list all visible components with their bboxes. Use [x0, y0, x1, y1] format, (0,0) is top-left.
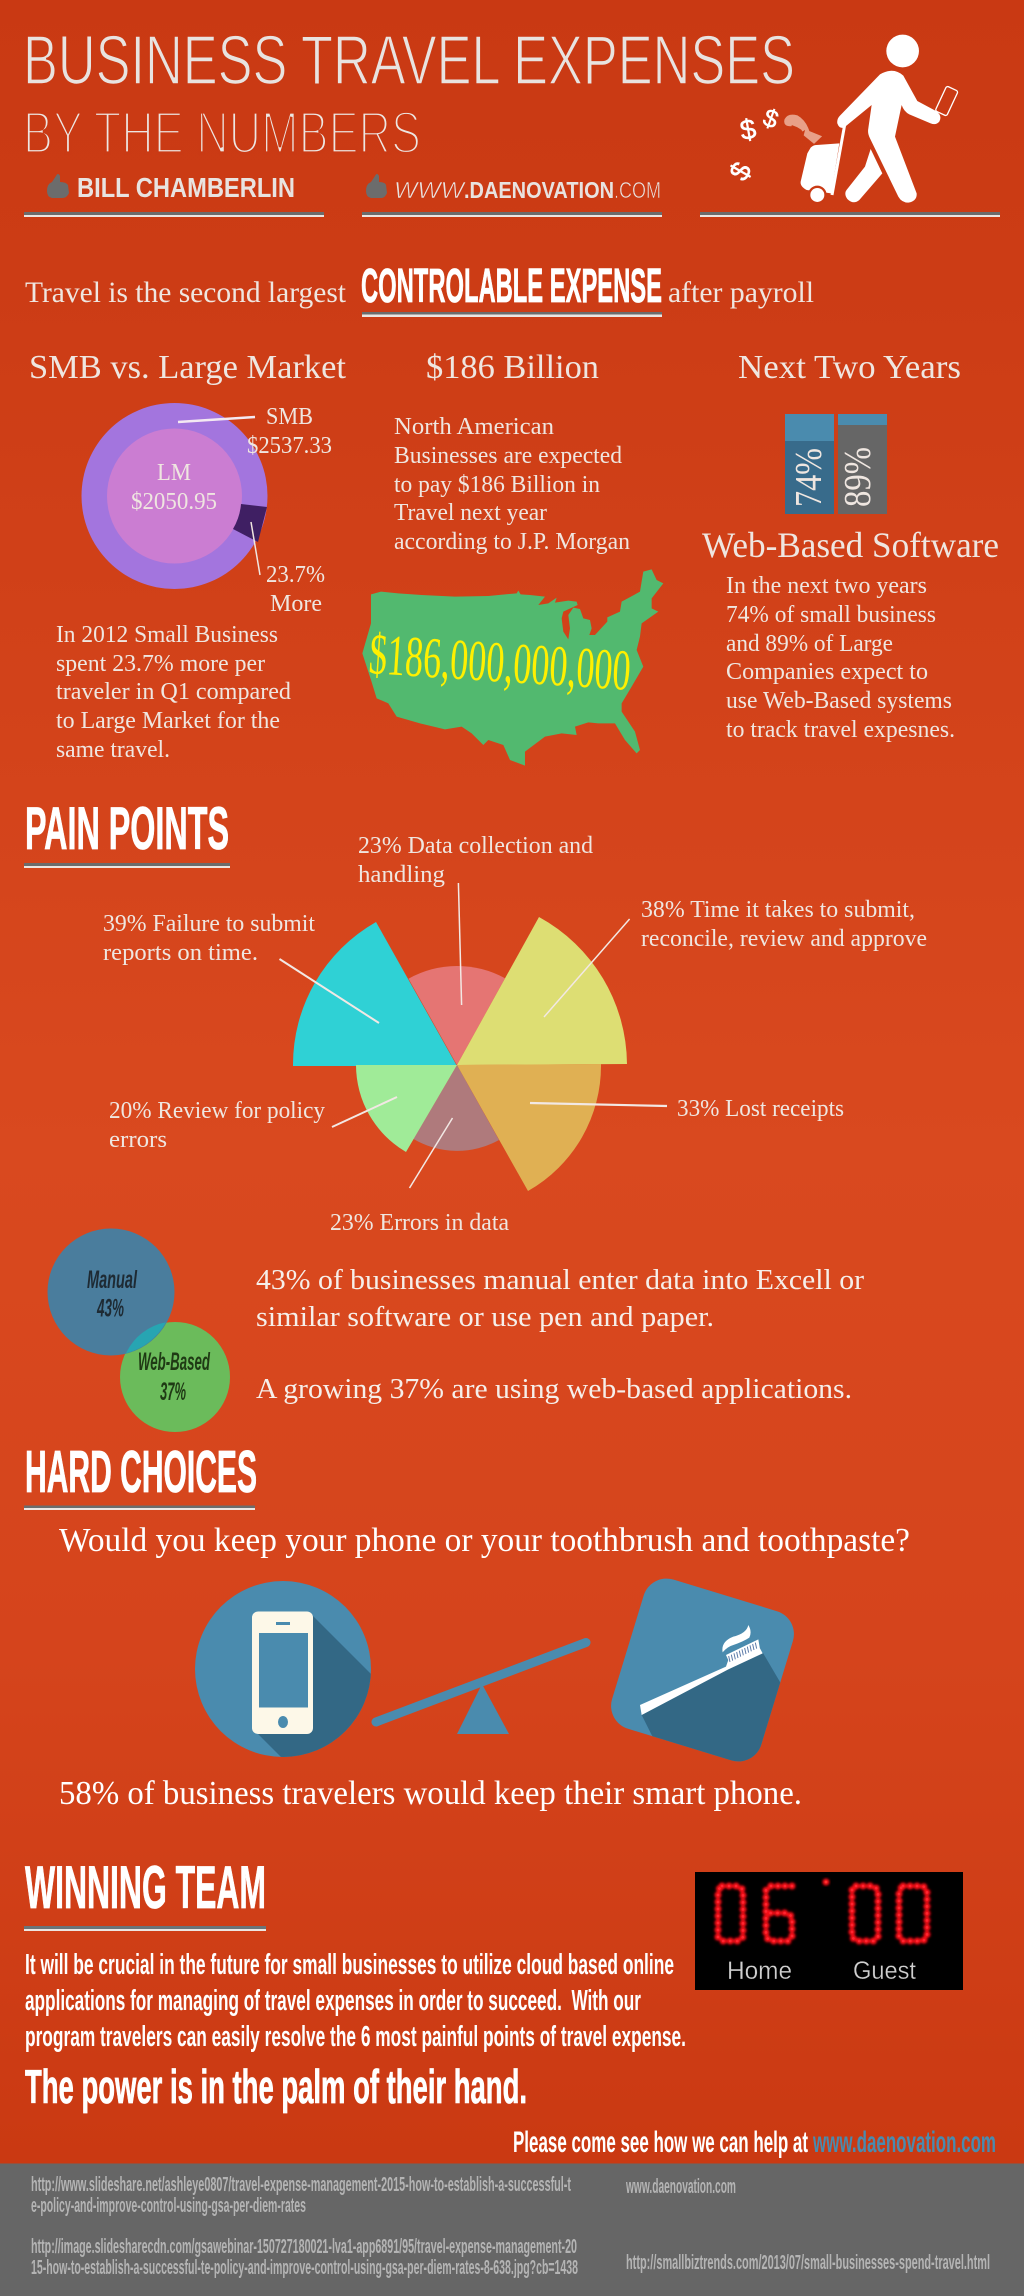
website: .DAENOVATION	[464, 177, 614, 203]
icon: traveler with suitcase	[723, 35, 958, 204]
panel: SMB vs large market	[29, 349, 347, 763]
heading: Next Two Years	[738, 349, 961, 386]
result statement: 58% of business travelers would keep their smart phone.	[59, 1775, 802, 1812]
icon: traveler with suitcase: $	[723, 156, 758, 186]
subtitle: BY THE NUMBERS	[23, 100, 421, 166]
text block: and 89% of Large	[726, 631, 893, 657]
text block: Businesses are expected	[394, 443, 622, 469]
bar chart	[785, 414, 887, 514]
text block	[25, 1949, 686, 2053]
icon: thumbs up author	[47, 174, 69, 198]
icon: seesaw	[376, 1642, 586, 1734]
label: failure to submit	[103, 911, 315, 966]
header	[23, 21, 1000, 217]
panel: pain points	[24, 795, 927, 1236]
author name: BILL CHAMBERLIN	[77, 172, 295, 203]
label: failure to submit: 39% Failure to submit	[103, 911, 315, 937]
scoreboard	[695, 1872, 963, 1990]
label: time to submit	[641, 897, 927, 952]
label: 23.7% more: 23.7%	[266, 562, 325, 588]
text block: data entry	[256, 1264, 864, 1405]
label: data collection	[358, 833, 593, 888]
scoreboard: Guest	[853, 1957, 916, 1985]
label: review	[109, 1098, 325, 1153]
heading: SMB vs. Large Market	[29, 349, 347, 386]
icon: traveler with suitcase: $	[759, 103, 782, 135]
label: 23.7% more: More	[270, 591, 322, 617]
label: data collection: handling	[358, 862, 445, 888]
call to action: Please come see how we can help at	[513, 2126, 808, 2159]
heading: WINNING TEAM	[25, 1854, 266, 1921]
label: data collection: 23% Data collection and	[358, 833, 593, 859]
label: time to submit: reconcile, review and approve	[641, 926, 927, 952]
heading: $186 Billion	[426, 349, 599, 386]
map: United States	[362, 569, 663, 766]
headline sentence	[25, 260, 814, 317]
label: SMB	[247, 404, 332, 459]
scoreboard: Home	[727, 1957, 792, 1985]
footer: sources	[0, 2164, 1024, 2296]
heading: HARD CHOICES	[25, 1439, 257, 1505]
text block	[726, 573, 955, 743]
panel: 186 billion	[362, 349, 663, 766]
text block: Travel next year	[394, 500, 547, 526]
icon: phone	[195, 1581, 371, 1757]
text block: use Web-Based systems	[726, 688, 952, 714]
venn diagram: manual and web-based	[48, 1228, 230, 1432]
footer: sources: e-policy-and-improve-control-using-gsa-per-diem-rates	[31, 2195, 306, 2217]
footer: sources: http://image.slidesharecdn.com/gsawebinar-150727180021-lva1-app6891/95/travel-expense-management-20	[31, 2236, 577, 2258]
headline sentence: after payroll	[668, 276, 814, 309]
text block	[394, 414, 630, 555]
map value: $186,000,000,000	[367, 621, 633, 703]
text block: data entry: similar software or use pen and paper.	[256, 1301, 714, 1333]
venn diagram: manual and web-based: Manual	[87, 1266, 138, 1294]
bar chart: 74%	[788, 448, 830, 507]
headline sentence: CONTROLABLE EXPENSE	[361, 260, 662, 313]
bar chart: 89%	[837, 447, 879, 507]
polar area chart	[280, 883, 667, 1191]
label: time to submit: 38% Time it takes to submit,	[641, 897, 915, 923]
headline sentence: Travel is the second largest	[25, 276, 347, 309]
label: failure to submit: reports on time.	[103, 940, 258, 966]
label: errors in data: 23% Errors in data	[330, 1210, 509, 1236]
label: SMB: $2537.33	[247, 433, 332, 459]
icon: traveler with suitcase: $	[738, 113, 759, 146]
subheading: Web-Based Software	[702, 525, 999, 565]
venn diagram: manual and web-based: 37%	[160, 1378, 186, 1406]
label: review: 20% Review for policy	[109, 1098, 325, 1124]
venn diagram: manual and web-based: Web-Based	[138, 1348, 210, 1376]
text block: In 2012 Small Business	[56, 622, 278, 648]
text block: according to J.P. Morgan	[394, 529, 630, 555]
website	[394, 177, 661, 203]
question: Would you keep your phone or your toothbrush and toothpaste?	[59, 1522, 910, 1559]
label: review: errors	[109, 1127, 167, 1153]
website: .COM	[614, 177, 661, 203]
donut chart	[82, 403, 268, 589]
label: SMB: SMB	[266, 404, 313, 430]
panel: next two years	[702, 349, 999, 743]
donut chart: $2050.95	[131, 489, 217, 515]
icon: toothbrush	[611, 1578, 794, 1762]
text block: data entry: 43% of businesses manual enter data into Excell or	[256, 1264, 864, 1296]
donut chart: LM	[157, 460, 191, 486]
footer: sources: http://www.slideshare.net/ashleye0807/travel-expense-management-2015-how-to-establish-a-successful-t	[31, 2174, 571, 2196]
website: WWW	[394, 177, 466, 203]
text block: traveler in Q1 compared	[56, 679, 291, 705]
text block	[56, 622, 291, 763]
icon: thumbs up website	[366, 174, 387, 198]
label: lost receipts: 33% Lost receipts	[677, 1096, 844, 1122]
venn diagram: manual and web-based: 43%	[96, 1294, 124, 1322]
text block: to pay $186 Billion in	[394, 472, 600, 498]
text block: 74% of small business	[726, 602, 936, 628]
text block: data entry: A growing 37% are using web-based applications.	[256, 1373, 852, 1405]
footer: sources: www.daenovation.com	[625, 2176, 736, 2198]
text block: In the next two years	[726, 573, 927, 599]
label: 23.7% more	[266, 562, 325, 617]
panel: hard choices	[24, 1439, 910, 1812]
heading: PAIN POINTS	[25, 795, 229, 862]
text block: North American	[394, 414, 554, 440]
text block: Companies expect to	[726, 659, 928, 685]
text block: to Large Market for the	[56, 708, 280, 734]
panel: winning team	[24, 1854, 996, 2159]
callout: The power is in the palm of their hand.	[25, 2060, 527, 2113]
text block: spent 23.7% more per	[56, 651, 265, 677]
text block: to track travel expesnes.	[726, 717, 955, 743]
text block: same travel.	[56, 737, 170, 763]
